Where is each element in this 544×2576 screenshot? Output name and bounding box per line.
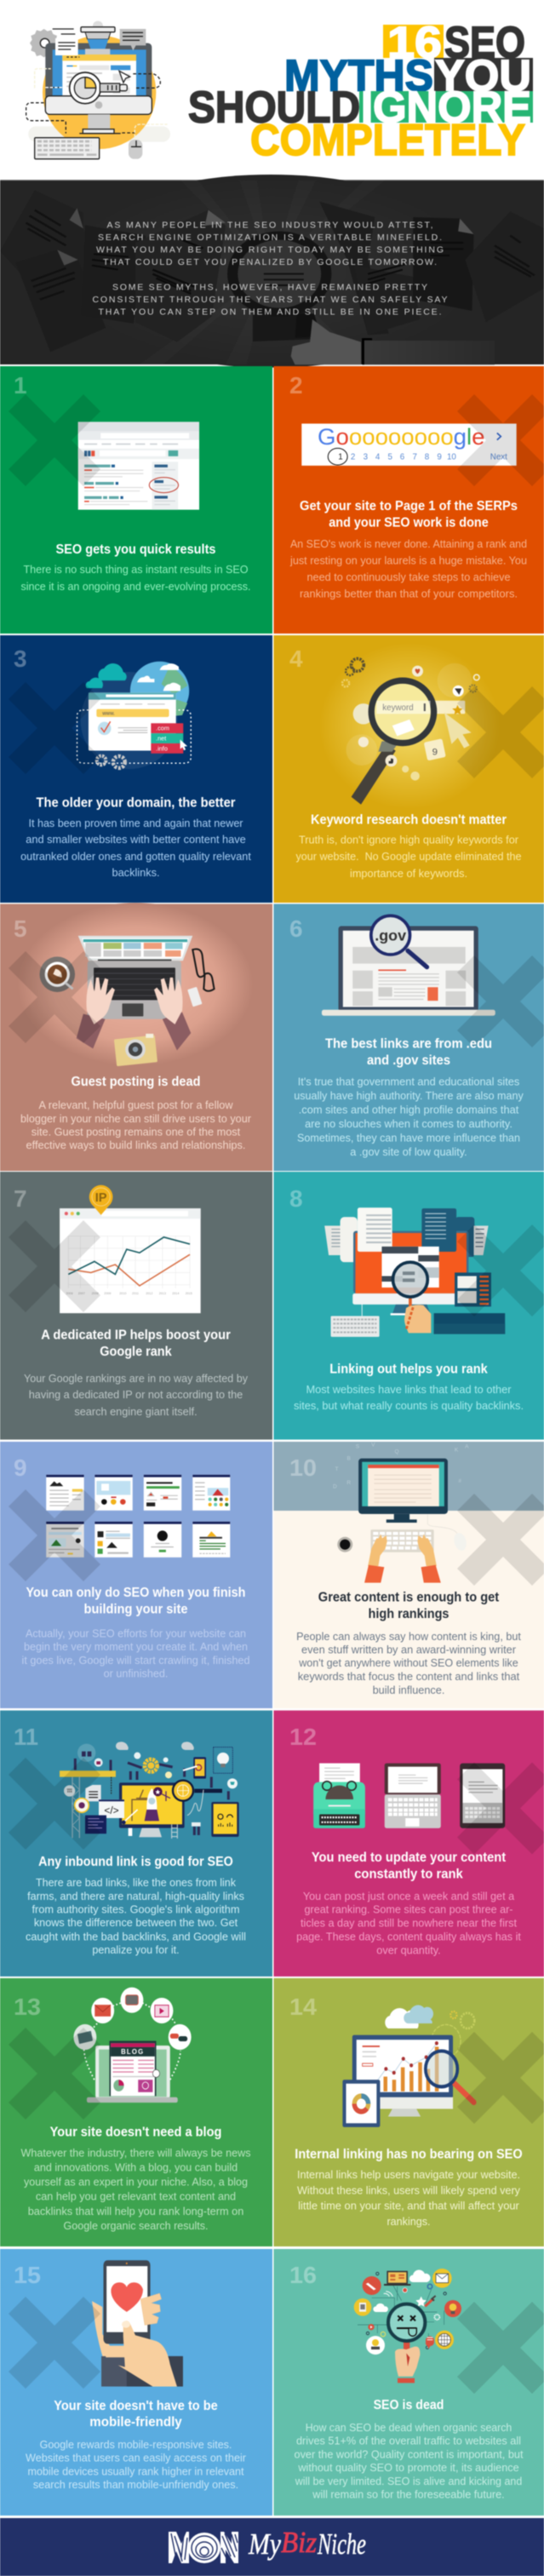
body text: will remain so for the foreseeable future. bbox=[312, 2487, 505, 2500]
heading bbox=[41, 1328, 231, 1359]
body text: your website. No Google update eliminated the bbox=[296, 850, 521, 863]
body text: drives 51+% of the overall traffic to websites all bbox=[296, 2434, 521, 2447]
heading bbox=[54, 2399, 218, 2430]
intro text: SEARCH ENGINE OPTIMIZATION IS A VERITABLE MINEFIELD. bbox=[98, 232, 442, 243]
illustration: .gov laptop: .gov bbox=[375, 927, 406, 944]
body text: farms, and there are natural, high-quality links bbox=[27, 1890, 244, 1902]
illustration: IP line chart: 2014 bbox=[172, 1292, 179, 1295]
body text: blogger in your niche can still drive users to your bbox=[20, 1112, 252, 1125]
body text: search results than mobile-unfriendly ones. bbox=[33, 2478, 238, 2491]
number: 15 bbox=[14, 2262, 41, 2288]
footer bbox=[0, 2518, 544, 2576]
body text: ticles a day and still be nowhere near the first bbox=[301, 1917, 517, 1930]
illustration: website thumbnails bbox=[46, 1475, 230, 1558]
body text: since it is an ongoing and ever-evolving process. bbox=[20, 580, 250, 593]
panel: myth 13 bbox=[0, 1978, 272, 2246]
icon: X mark bbox=[457, 1225, 544, 1317]
icon: X mark bbox=[457, 686, 544, 778]
body text: page. These days, content quality always has it bbox=[296, 1930, 521, 1942]
body text: There are bad links, like the ones from link bbox=[36, 1876, 236, 1889]
body text: You can post just once a week and still get a bbox=[303, 1890, 515, 1902]
panel: myth 2 bbox=[274, 366, 544, 634]
panel: myth 10 bbox=[274, 1442, 544, 1708]
header bbox=[26, 19, 533, 165]
illustration: IP line chart: IP bbox=[95, 1191, 107, 1205]
logo wordmark bbox=[248, 2526, 366, 2561]
panel: intro bbox=[0, 175, 544, 368]
heading: and .gov sites bbox=[367, 1053, 450, 1068]
illustration: Google pagination: Gooooooooogle bbox=[318, 424, 485, 450]
body text: without quality SEO to promote it, its audience bbox=[297, 2461, 519, 2474]
heading: You need to update your content bbox=[312, 1850, 507, 1865]
title: IGNORE bbox=[361, 83, 531, 133]
heading: Any inbound link is good for SEO bbox=[38, 1855, 233, 1869]
illustration: blog laptop with icons bbox=[73, 1988, 192, 2103]
heading: Your site doesn't have to be bbox=[54, 2399, 218, 2413]
illustration: typewriter, laptop and tablet bbox=[313, 1764, 505, 1828]
illustration: domain names: www. bbox=[101, 711, 115, 717]
body text: great ranking. Some sites can post three ar- bbox=[305, 1903, 513, 1916]
illustration: typing at a computer: Q bbox=[394, 1449, 399, 1455]
icon: X mark bbox=[9, 951, 100, 1043]
heading: A dedicated IP helps boost your bbox=[41, 1328, 231, 1343]
panel: myth 15 bbox=[0, 2249, 272, 2516]
panel: myth 5 bbox=[0, 903, 272, 1171]
icon: X mark bbox=[457, 2302, 544, 2394]
body text: Your Google rankings are in no way affected by bbox=[24, 1372, 248, 1385]
panel: myth 3 bbox=[0, 635, 272, 903]
illustration: blog laptop with icons: BLOG bbox=[121, 2048, 144, 2056]
heading: Get your site to Page 1 of the SERPs bbox=[300, 499, 518, 513]
heading: SEO is dead bbox=[374, 2398, 444, 2412]
illustration: keyword magnifier: keyword bbox=[382, 703, 414, 713]
body text bbox=[24, 1372, 248, 1418]
heading bbox=[300, 499, 518, 530]
illustration: Google pagination: 8 bbox=[425, 452, 429, 462]
illustration: .gov laptop bbox=[322, 915, 495, 1016]
illustration: IP line chart: 2009 bbox=[104, 1292, 111, 1295]
illustration: typing at a computer: B bbox=[347, 1456, 351, 1462]
title: SEO bbox=[444, 19, 525, 68]
body text: backlinks. bbox=[112, 866, 160, 879]
panel: myth 12 bbox=[274, 1711, 544, 1976]
illustration: IP line chart: 2011 bbox=[132, 1292, 139, 1295]
body text: effective ways to build links and relationships. bbox=[26, 1139, 245, 1151]
illustration: laptop and hands bbox=[17, 903, 254, 1066]
number: 12 bbox=[289, 1724, 317, 1750]
heading: You can only do SEO when you finish bbox=[26, 1586, 245, 1600]
illustration: documents and magnifier background bbox=[0, 175, 544, 368]
body text bbox=[20, 1099, 252, 1151]
icon: X mark bbox=[9, 2028, 100, 2120]
heading: and your SEO work is done bbox=[329, 516, 489, 530]
heading bbox=[312, 1850, 507, 1882]
title: 16 bbox=[387, 19, 442, 68]
number: 16 bbox=[289, 2262, 317, 2288]
body text bbox=[26, 2438, 247, 2491]
body text: Truth is, don't ignore high quality keywords for bbox=[299, 834, 519, 846]
number: 1 bbox=[14, 372, 27, 399]
body text: build influence. bbox=[373, 1684, 444, 1696]
title bbox=[188, 19, 533, 165]
intro text: THAT COULD GET YOU PENALIZED BY GOOGLE TOMORROW. bbox=[103, 257, 437, 267]
heading: constantly to rank bbox=[354, 1867, 463, 1882]
body text: It has been proven time and again that newer bbox=[29, 817, 243, 829]
title: SHOULD bbox=[188, 83, 360, 133]
heading: high rankings bbox=[368, 1607, 450, 1621]
number: 4 bbox=[289, 645, 303, 672]
illustration: typing at a computer bbox=[333, 1442, 469, 1583]
icon: X mark bbox=[9, 682, 100, 774]
body text: or unfinished. bbox=[104, 1667, 168, 1679]
illustration: Google pagination: 7 bbox=[412, 452, 417, 462]
body text: Most websites have links that lead to other bbox=[306, 1383, 512, 1396]
body text: begin the very moment you create it. And when bbox=[24, 1640, 248, 1653]
body text bbox=[297, 2168, 520, 2228]
heading bbox=[318, 1591, 500, 1621]
intro text: WHAT YOU MAY BE DOING RIGHT TODAY MAY BE SOMETHING bbox=[96, 245, 444, 255]
title: MYTHS bbox=[284, 51, 433, 100]
body text: even stuff written by an award-winning writer bbox=[301, 1643, 517, 1655]
body text bbox=[294, 1076, 524, 1158]
number: 13 bbox=[14, 1994, 41, 2020]
icon: X mark bbox=[457, 955, 544, 1047]
icon: X mark bbox=[9, 1489, 100, 1581]
illustration: domain names: .net bbox=[156, 734, 166, 742]
illustration: typing at a computer: D bbox=[333, 1483, 337, 1489]
icon: X mark bbox=[9, 1758, 100, 1850]
body text bbox=[20, 563, 250, 593]
icon: X mark bbox=[457, 2032, 544, 2124]
illustration: typing at a computer: K bbox=[455, 1447, 459, 1453]
illustration: keyword magnifier bbox=[319, 642, 500, 809]
number: 5 bbox=[14, 915, 27, 942]
body text bbox=[20, 2146, 251, 2232]
illustration: IP line chart: 2013 bbox=[159, 1292, 166, 1295]
illustration: IP line chart: 2015 bbox=[186, 1292, 192, 1295]
body text: Sometimes, they can have more influence than bbox=[297, 1132, 520, 1145]
body text: won't get anywhere without SEO elements like bbox=[298, 1656, 518, 1669]
title: YOU bbox=[435, 51, 531, 100]
heading: Your site doesn't need a blog bbox=[50, 2125, 221, 2139]
body text: outranked older ones and gotten quality relevant bbox=[20, 850, 251, 863]
body text: over the world? Quality content is important, but bbox=[295, 2447, 524, 2460]
heading bbox=[325, 1037, 492, 1068]
illustration: Google pagination: 9 bbox=[437, 452, 442, 462]
illustration: Google pagination: 6 bbox=[400, 452, 404, 462]
body text: just resting on your laurels is a huge mistake. You bbox=[289, 554, 527, 567]
icon: X mark bbox=[9, 2297, 100, 2389]
body text: Google organic search results. bbox=[63, 2219, 208, 2232]
icon: X mark bbox=[9, 394, 100, 486]
body text: An SEO's work is never done. Attaining a rank and bbox=[290, 537, 527, 550]
illustration: Google pagination bbox=[301, 423, 517, 466]
illustration: SEO desktop computer bbox=[26, 21, 170, 159]
body text: It's true that government and educational sites bbox=[298, 1076, 520, 1088]
body text: a .gov site of low quality. bbox=[350, 1145, 467, 1158]
icon: X mark bbox=[457, 1494, 544, 1586]
body text bbox=[296, 1630, 521, 1696]
illustration: keyword magnifier: 9 bbox=[432, 747, 438, 757]
body text bbox=[295, 2421, 524, 2500]
panel: myth 4 bbox=[274, 635, 544, 903]
panel: myth 11 bbox=[0, 1711, 272, 1976]
icon: fingerprint logo bbox=[169, 2532, 238, 2563]
illustration: typing at a computer: # bbox=[458, 1478, 461, 1484]
logo wordmark: Biz bbox=[281, 2526, 317, 2559]
illustration: IP line chart: 2007 bbox=[78, 1292, 85, 1295]
illustration: IP line chart: 2010 bbox=[119, 1292, 126, 1295]
logo wordmark: My bbox=[248, 2527, 281, 2561]
number: 3 bbox=[14, 645, 27, 672]
body text: it goes live, Google will start crawling it, finished bbox=[22, 1654, 250, 1667]
illustration: domain names: .com bbox=[156, 724, 169, 731]
illustration: phone with heart bbox=[92, 2260, 183, 2386]
logo wordmark: Niche bbox=[317, 2527, 366, 2561]
illustration: computer with documents and magnifier bbox=[324, 1208, 505, 1337]
body text: need to continuously take steps to achieve bbox=[306, 571, 511, 583]
body text: are no slouches when it comes to authority. bbox=[305, 1117, 513, 1130]
illustration: domain names: .info bbox=[156, 745, 168, 753]
body text: yourself as an expert in your niche. Also, a blog bbox=[24, 2176, 248, 2189]
panel: myth 7 bbox=[0, 1172, 272, 1439]
illustration: IP line chart bbox=[60, 1185, 201, 1313]
heading: Great content is enough to get bbox=[318, 1591, 500, 1605]
body text: knows the difference between the two. Get bbox=[34, 1916, 238, 1929]
illustration: analytics monitor bbox=[342, 2005, 474, 2127]
body text: How can SEO be dead when organic search bbox=[306, 2421, 512, 2434]
number: 10 bbox=[289, 1454, 317, 1481]
illustration: IP line chart: 2012 bbox=[146, 1292, 152, 1295]
body text: and smaller websites with better content have bbox=[26, 833, 246, 846]
panel: myth 16 bbox=[274, 2249, 544, 2516]
body text: importance of keywords. bbox=[350, 867, 467, 880]
panel: myth 6 bbox=[274, 904, 544, 1171]
body text: Google rewards mobile-responsive sites. bbox=[40, 2438, 232, 2451]
heading: Keyword research doesn't matter bbox=[311, 812, 507, 828]
body text: and innovations. With a blog, you can build bbox=[34, 2160, 238, 2173]
body text bbox=[22, 1627, 250, 1679]
number: 9 bbox=[14, 1454, 27, 1481]
number: 2 bbox=[289, 372, 303, 399]
illustration: typing at a computer: R bbox=[346, 1480, 351, 1486]
heading: Linking out helps you rank bbox=[329, 1363, 488, 1377]
illustration: typing at a computer: S bbox=[356, 1443, 360, 1449]
body text: backlinks that will help you rank long-term on bbox=[28, 2205, 243, 2217]
intro text bbox=[92, 220, 447, 318]
body text: over quantity. bbox=[376, 1944, 441, 1957]
illustration: search results browser bbox=[78, 422, 199, 510]
number: 7 bbox=[14, 1185, 27, 1212]
body text: usually have high authority. There are also many bbox=[294, 1089, 524, 1102]
heading: Internal linking has no bearing on SEO bbox=[295, 2147, 523, 2161]
body text bbox=[20, 817, 251, 879]
illustration: Google pagination: 4 bbox=[375, 452, 381, 462]
body text: having a dedicated IP or not according to the bbox=[29, 1388, 243, 1401]
body text: will be very limited. SEO is alive and kicking and bbox=[295, 2475, 522, 2487]
icon: X mark bbox=[9, 1220, 100, 1312]
body text: People can always say how content is king, but bbox=[296, 1630, 521, 1643]
illustration: typing at a computer: V bbox=[371, 1442, 375, 1448]
body text: penalize you for it. bbox=[92, 1943, 180, 1956]
panel: myth 8 bbox=[274, 1172, 544, 1439]
illustration: link building team: </> bbox=[104, 1804, 119, 1816]
body text: can help you get relevant text content and bbox=[36, 2190, 236, 2203]
heading: Google rank bbox=[100, 1345, 172, 1359]
number: 8 bbox=[289, 1185, 303, 1212]
heading: Guest posting is dead bbox=[72, 1075, 201, 1089]
body text bbox=[289, 537, 527, 600]
body text: Whatever the industry, there will always be news bbox=[20, 2146, 251, 2160]
illustration: Google pagination: Next bbox=[490, 452, 507, 462]
panel: myth 14 bbox=[274, 1978, 544, 2246]
body text: A relevant, helpful guest post for a fellow bbox=[39, 1099, 233, 1111]
intro text: SOME SEO MYTHS, HOWEVER, HAVE REMAINED PRETTY bbox=[112, 282, 427, 292]
illustration: dead face magnifier bbox=[354, 2269, 461, 2383]
body text bbox=[296, 1890, 521, 1957]
number: 14 bbox=[289, 1994, 317, 2020]
body text: search engine giant itself. bbox=[74, 1405, 198, 1418]
body text: little time on your site, and that will affect your bbox=[298, 2199, 520, 2212]
intro text: AS MANY PEOPLE IN THE SEO INDUSTRY WOULD ATTEST, bbox=[107, 220, 432, 230]
illustration: Google pagination: 1 bbox=[338, 452, 343, 462]
body text: sites, but what really counts is quality backlinks. bbox=[294, 1399, 524, 1412]
body text bbox=[294, 1383, 524, 1412]
illustration: Google pagination: 5 bbox=[388, 452, 393, 462]
icon: X mark bbox=[457, 1763, 544, 1855]
heading bbox=[26, 1586, 245, 1616]
illustration: Google pagination: 2 bbox=[351, 452, 355, 462]
illustration: Google pagination: 10 bbox=[447, 452, 456, 462]
body text bbox=[296, 834, 521, 880]
body text: from authority sites. Google's link algorithm bbox=[32, 1903, 240, 1916]
illustration: Google pagination: 3 bbox=[364, 452, 368, 462]
body text: mobile devices usually rank higher in relevant bbox=[27, 2464, 244, 2478]
panel: myth 1 bbox=[0, 366, 272, 634]
illustration: IP line chart: 2006 bbox=[66, 1292, 73, 1295]
illustration: typing at a computer: A bbox=[465, 1443, 469, 1449]
title: COMPLETELY bbox=[250, 116, 525, 165]
body text: rankings. bbox=[387, 2215, 431, 2228]
heading: The best links are from .edu bbox=[325, 1037, 492, 1052]
body text: There is no such thing as instant results in SEO bbox=[24, 563, 249, 576]
panel: myth 9 bbox=[0, 1442, 272, 1708]
illustration: link building team bbox=[60, 1741, 239, 1839]
illustration: domain names bbox=[77, 662, 191, 769]
body text: rankings better than that of your competitors. bbox=[300, 588, 518, 600]
number: 6 bbox=[289, 915, 303, 942]
body text bbox=[26, 1876, 246, 1956]
intro text: CONSISTENT THROUGH THE YEARS THAT WE CAN SAFELY SAY bbox=[92, 295, 447, 305]
body text: site. Guest posting remains one of the most bbox=[31, 1126, 241, 1139]
body text: caught with the bad backlinks, and Google will bbox=[26, 1930, 246, 1942]
illustration: IP line chart: 2008 bbox=[92, 1292, 99, 1295]
heading: mobile-friendly bbox=[89, 2415, 182, 2430]
body text: Websites that users can easily access on their bbox=[26, 2451, 247, 2464]
heading: building your site bbox=[83, 1602, 188, 1616]
body text: Without these links, users will likely spend very bbox=[297, 2183, 520, 2196]
illustration: typing at a computer: T bbox=[335, 1466, 338, 1472]
body text: Actually, your SEO efforts for your website can bbox=[26, 1627, 246, 1640]
number: 11 bbox=[14, 1724, 38, 1750]
body text: keywords that focus the content and links that bbox=[298, 1670, 520, 1683]
heading: SEO gets you quick results bbox=[56, 542, 216, 557]
body text: Internal links help users navigate your website. bbox=[297, 2168, 520, 2181]
body text: .com sites and other high profile domains that bbox=[299, 1104, 519, 1116]
icon: X mark bbox=[457, 394, 544, 486]
heading: The older your domain, the better bbox=[36, 795, 235, 811]
intro text: THAT YOU CAN STEP ON THEM AND STILL BE IN ONE PIECE. bbox=[99, 307, 441, 318]
